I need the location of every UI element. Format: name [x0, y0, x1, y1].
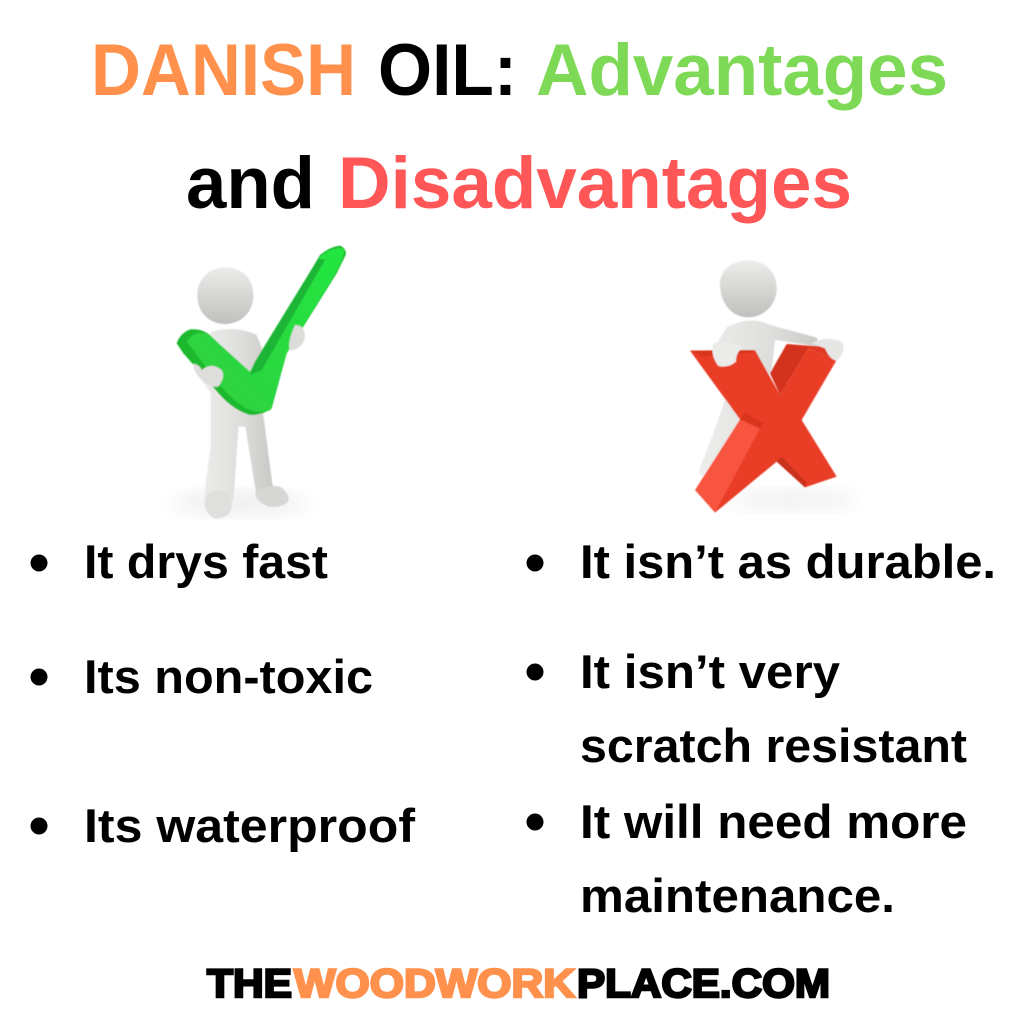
bullet: maintenance [526, 796, 967, 923]
bullet: maintenance: maintenance. [580, 870, 895, 923]
title line 2: Disadvantages [338, 143, 852, 224]
footer website name [207, 962, 830, 1006]
title line 1: Advantages [536, 30, 948, 111]
title line 1 [91, 30, 948, 111]
bullet: waterproof: Its waterproof [84, 800, 415, 853]
footer website name: WOODWORK [294, 962, 575, 1006]
advantages list [30, 536, 415, 853]
bullet: scratch resistance: It isn’t very [580, 646, 841, 699]
footer website name: THE [207, 962, 292, 1006]
bullet: maintenance: It will need more [580, 796, 967, 849]
bullet: scratch resistance [526, 646, 967, 773]
footer website name: PLACE.COM [577, 962, 830, 1006]
bullet: durability: It isn’t as durable. [580, 536, 996, 589]
bullet: dries fast: It drys fast [84, 536, 328, 589]
title line 2: and [186, 143, 315, 224]
title line 1: DANISH [91, 30, 356, 111]
bullet: scratch resistance: scratch resistant [580, 720, 967, 773]
disadvantages list [526, 536, 996, 923]
title line 1: OIL: [378, 30, 517, 111]
icon: figure holding red X [690, 261, 857, 513]
icon: figure holding green check mark [173, 246, 346, 519]
bullet: non-toxic: Its non-toxic [84, 651, 373, 704]
title [91, 30, 948, 224]
